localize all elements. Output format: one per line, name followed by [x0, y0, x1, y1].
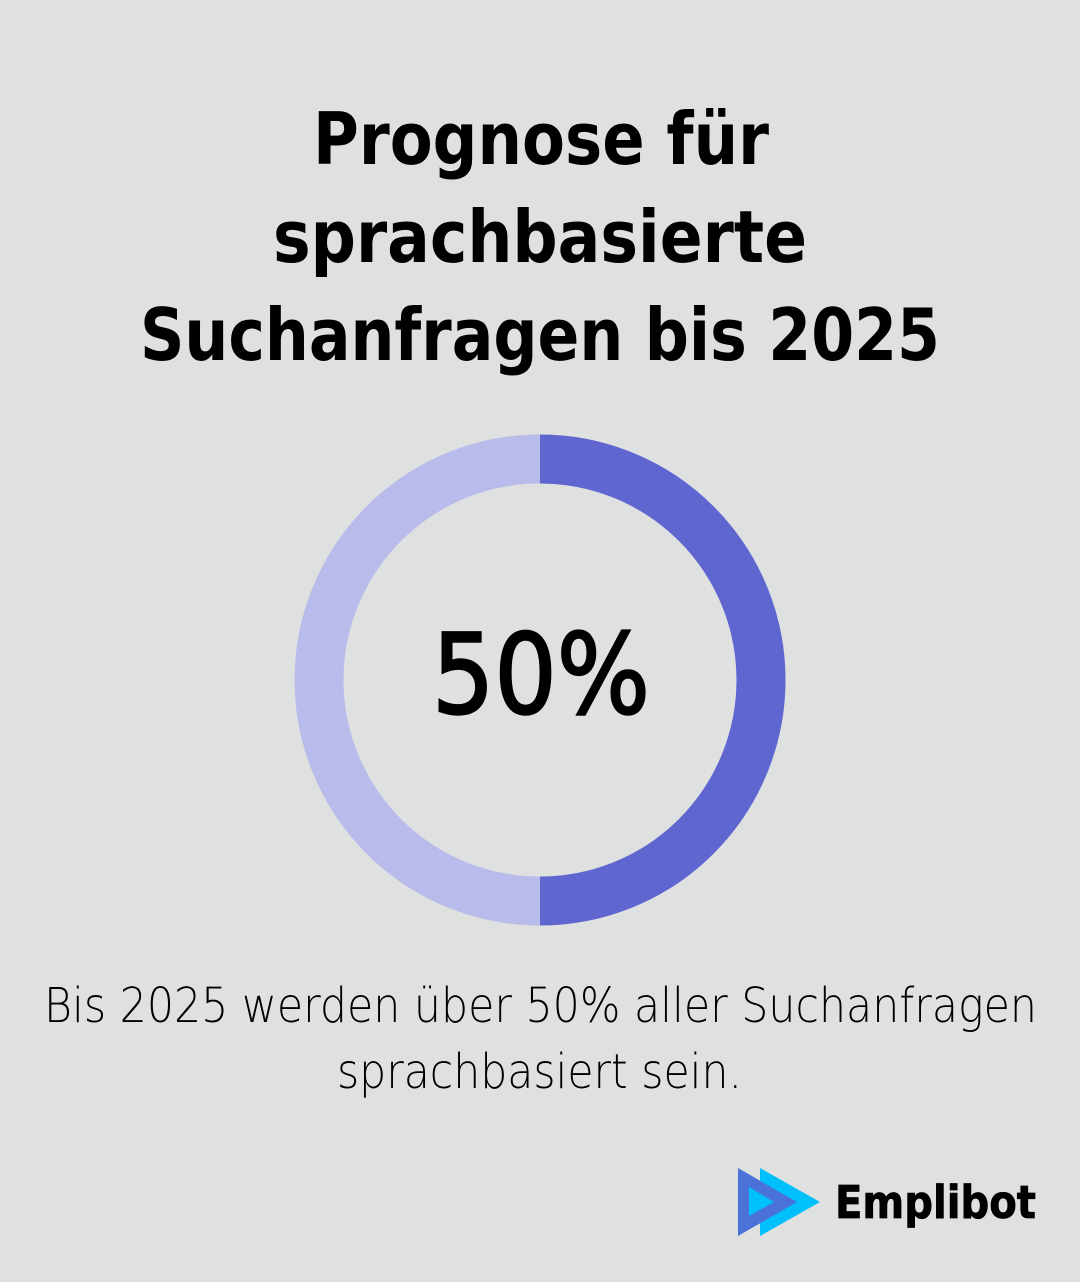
title [140, 97, 940, 377]
title: sprachbasierte [273, 195, 807, 279]
donut chart: 50% [319, 459, 761, 901]
title: Suchanfragen bis 2025 [140, 293, 940, 377]
title: Prognose für [313, 97, 769, 181]
icon: play triangles [738, 1168, 820, 1236]
logo: Emplibot [738, 1168, 1036, 1236]
donut value: 50% [432, 611, 650, 740]
description text [44, 978, 1037, 1100]
description text: sprachbasiert sein. [337, 1044, 742, 1100]
logo wordmark: Emplibot [835, 1176, 1036, 1229]
